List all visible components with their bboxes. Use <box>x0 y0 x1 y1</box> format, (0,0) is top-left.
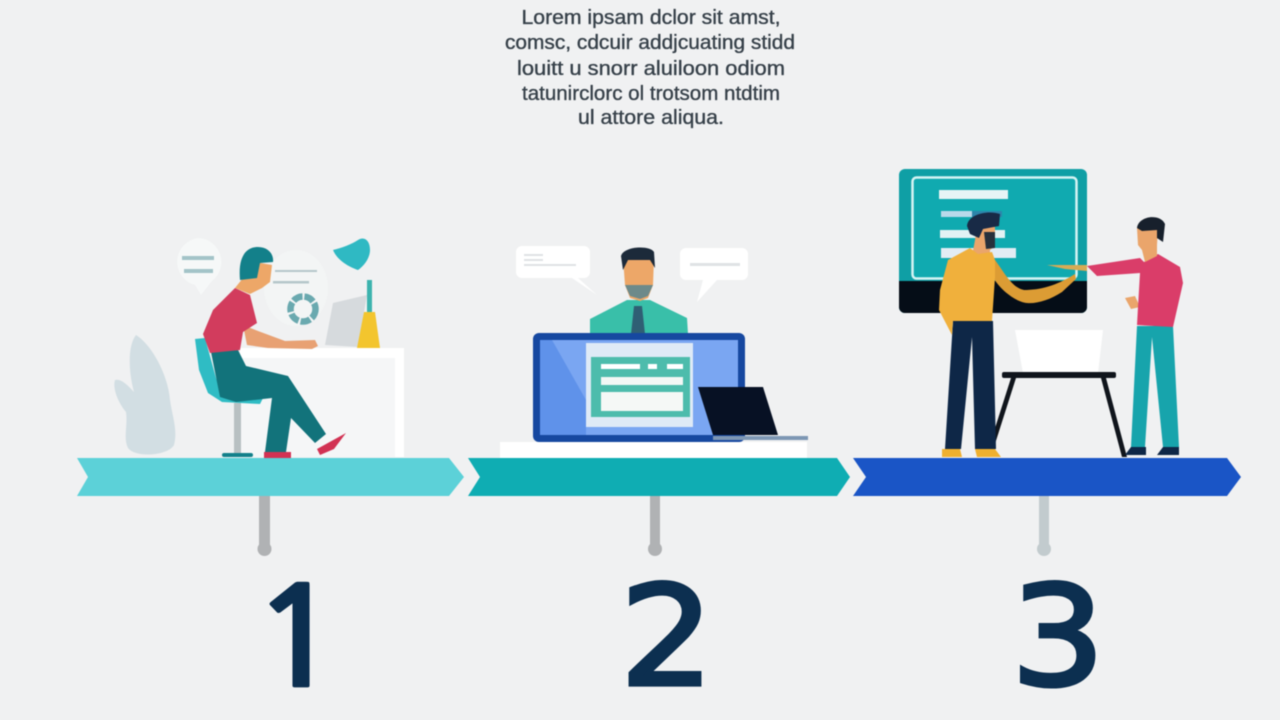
hair <box>1137 217 1165 242</box>
heading text block: Lorem ipsam dclor sit amst, <box>522 7 780 29</box>
tie <box>631 306 645 334</box>
arrow banner: step 1 <box>77 458 464 496</box>
coffee table with white screen <box>989 330 1127 457</box>
beard <box>625 285 653 299</box>
number 3: 3 <box>1011 556 1105 717</box>
chair <box>195 338 263 457</box>
arm <box>243 325 318 349</box>
number 1: 1 <box>249 571 346 708</box>
hand <box>1125 296 1140 309</box>
speech bubble right <box>680 248 748 302</box>
beard <box>984 232 995 249</box>
arrow banner: step 3 <box>853 458 1241 496</box>
face <box>623 258 654 301</box>
trousers <box>1131 326 1179 447</box>
laptop <box>698 387 808 440</box>
panel: step 1 illustration <box>114 238 404 458</box>
panel: step 3 illustration <box>899 169 1183 457</box>
connector pin 2 <box>648 496 662 556</box>
icon: plant <box>114 335 175 454</box>
panel: step 2 illustration <box>500 246 808 458</box>
speech bubble left <box>516 246 597 295</box>
hair <box>621 247 655 270</box>
face <box>1137 228 1158 262</box>
heading text block: comsc, cdcuir addjcuating stidd <box>505 32 795 54</box>
man in pink <box>1047 217 1183 455</box>
number 2: 2 <box>620 556 714 717</box>
icon: thought bubble with chart <box>264 250 328 326</box>
presentation board <box>899 169 1087 313</box>
icon: speech bubble with notes <box>177 238 221 295</box>
shoes <box>942 449 962 457</box>
shoes <box>264 452 291 458</box>
head <box>235 262 272 294</box>
monitor <box>533 333 745 442</box>
person at desk <box>203 247 346 458</box>
shirt <box>939 248 995 335</box>
connector pin 1 <box>258 496 272 556</box>
arrow banner: step 2 <box>468 458 850 496</box>
trousers <box>945 321 996 449</box>
heading text block <box>505 7 795 129</box>
laptop <box>325 295 367 347</box>
man in yellow <box>939 212 1076 457</box>
white shelf <box>500 442 807 458</box>
trousers <box>211 350 326 452</box>
shoes <box>1125 447 1146 455</box>
pointer <box>1047 265 1087 271</box>
torso <box>590 300 688 334</box>
connector pin 3 <box>1037 496 1051 556</box>
arm <box>993 260 1076 303</box>
presenter <box>590 247 688 334</box>
window card <box>586 343 693 427</box>
shirt <box>203 288 257 353</box>
desk lamp <box>333 238 380 348</box>
heading text block: tatunirclorc ol trotsom ntdtim <box>522 83 780 105</box>
shirt <box>1087 254 1183 327</box>
heading text block: louitt u snorr aluiloon odiom <box>517 58 785 80</box>
heading text block: ul attore aliqua. <box>578 107 724 129</box>
desk <box>240 348 404 457</box>
hair <box>240 247 273 280</box>
face <box>972 227 995 258</box>
hair <box>967 212 1000 238</box>
